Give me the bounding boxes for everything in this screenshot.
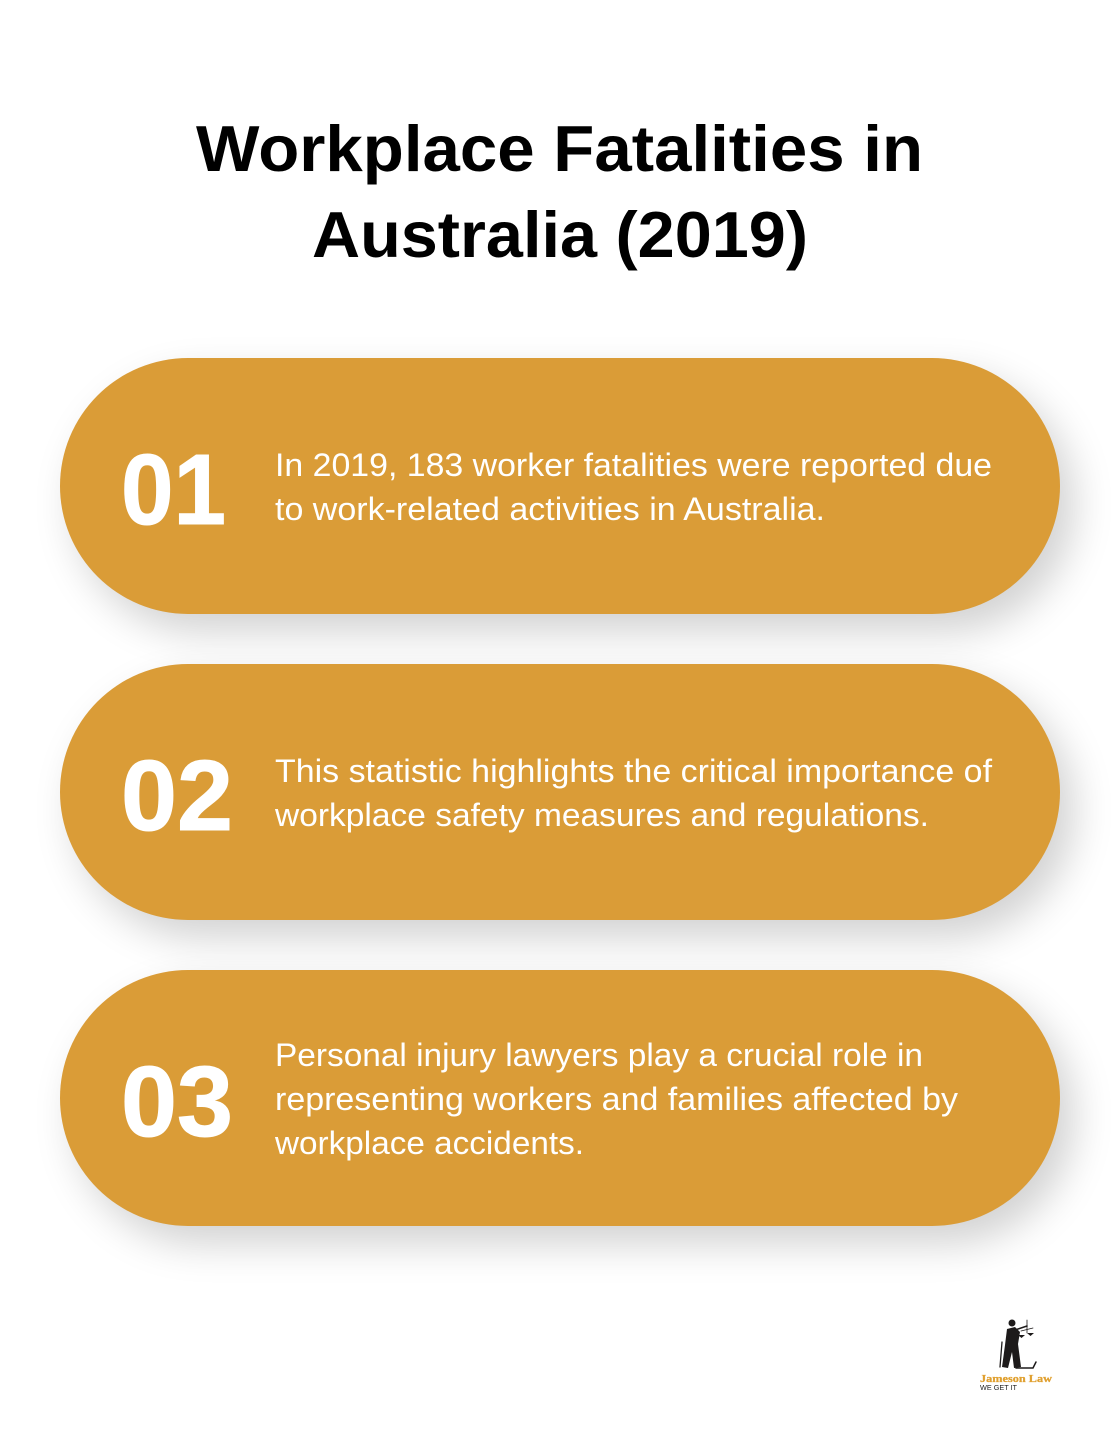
text: card 2: This statistic highlights the critical importance of bbox=[275, 753, 993, 789]
panel: card 1 background bbox=[60, 358, 1060, 614]
title: Australia (2019) bbox=[312, 198, 808, 271]
logo tagline: WE GET IT bbox=[980, 1385, 1018, 1392]
text: card 1: In 2019, 183 worker fatalities were reported due bbox=[275, 447, 992, 483]
title: Workplace Fatalities in bbox=[196, 112, 923, 185]
text: card 3: Personal injury lawyers play a crucial role in bbox=[275, 1037, 923, 1073]
text: card 3 bbox=[274, 1037, 959, 1161]
text: card 2 bbox=[274, 753, 993, 833]
text: card 3: representing workers and families affected by bbox=[275, 1081, 959, 1117]
title bbox=[196, 112, 923, 271]
number 03: 03 bbox=[121, 1046, 233, 1158]
number 01: 01 bbox=[121, 434, 226, 546]
text: card 2: workplace safety measures and regulations. bbox=[274, 797, 929, 833]
panel: card 3 background bbox=[60, 970, 1060, 1226]
text: card 1 bbox=[275, 447, 992, 527]
text: card 3: workplace accidents. bbox=[274, 1125, 584, 1161]
logo name: Jameson Law bbox=[980, 1373, 1052, 1385]
number 02: 02 bbox=[121, 740, 233, 852]
text: card 1: to work-related activities in Australia. bbox=[275, 491, 825, 527]
panel: card 2 background bbox=[60, 664, 1060, 920]
logo: Jameson Law bbox=[980, 1320, 1052, 1392]
icon: lady justice bbox=[1000, 1320, 1036, 1368]
